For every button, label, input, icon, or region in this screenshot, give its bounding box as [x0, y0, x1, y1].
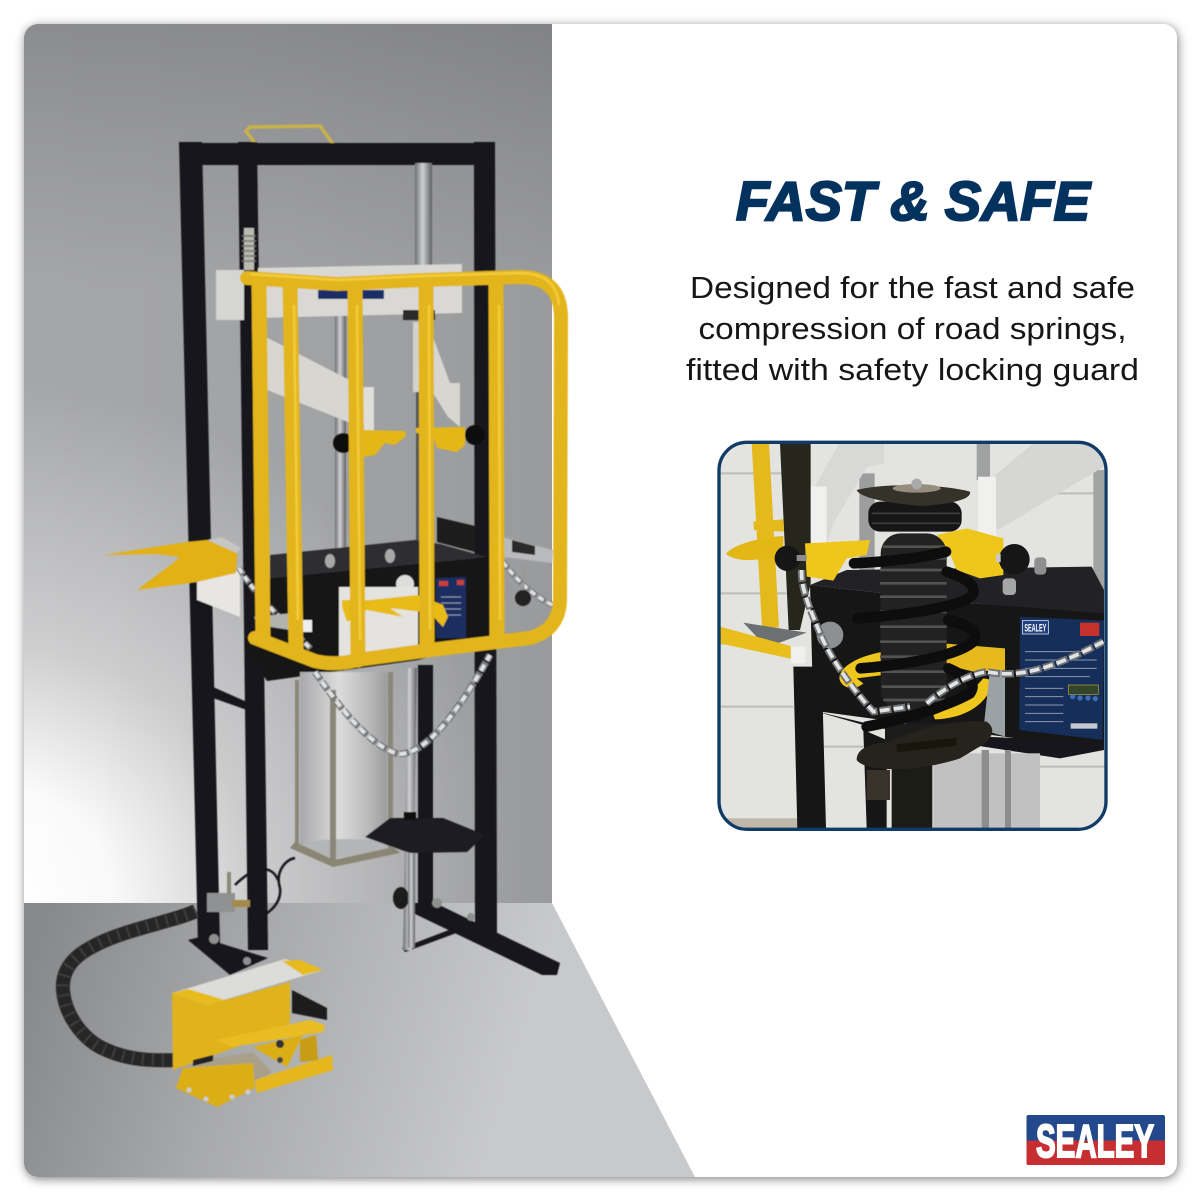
bolted plate — [817, 622, 843, 648]
piston rod and spring — [242, 163, 432, 548]
foot pedal plate — [365, 812, 485, 948]
foot bolts — [209, 898, 475, 965]
carry handle — [246, 126, 333, 144]
galvanised chain — [802, 570, 1103, 712]
silver arms — [815, 443, 884, 543]
guard clamp and knob — [254, 537, 553, 632]
coil spring — [854, 552, 975, 727]
yellow spring seats and knobs — [333, 425, 485, 457]
air hose — [63, 911, 196, 1060]
strut bellows — [857, 479, 992, 828]
black frame — [179, 142, 560, 975]
white cross beam with arms — [216, 264, 462, 432]
knobs — [775, 546, 800, 571]
inset photo — [719, 442, 1106, 829]
SEALEY data plate — [1019, 617, 1104, 740]
brick wall — [720, 443, 1105, 828]
left fork seat — [103, 537, 241, 617]
data plate — [436, 577, 466, 638]
guard tube and uprights — [780, 443, 811, 630]
safety chains — [239, 562, 555, 754]
product: spring compressor machine — [63, 126, 561, 1107]
description text: Designed for the fast and safe — [690, 270, 1135, 305]
black platform — [810, 567, 1104, 615]
air valve block — [207, 872, 250, 912]
description text: compression of road springs, — [698, 311, 1126, 346]
foot valve — [172, 959, 333, 1107]
yellow seats — [805, 540, 870, 581]
yellow safety guard — [247, 277, 561, 663]
platform box — [247, 517, 488, 681]
inset border — [719, 442, 1106, 829]
silver cylinder — [933, 753, 1040, 828]
description text: fitted with safety locking guard — [686, 352, 1139, 387]
air cylinder — [235, 668, 417, 950]
rods — [977, 443, 990, 480]
panel: grey studio backdrop — [24, 24, 695, 1177]
SEALEY data plate: SEALEY — [1024, 622, 1046, 634]
guard highlights — [250, 273, 559, 640]
description text — [686, 270, 1139, 387]
title: FAST & SAFE — [736, 170, 1092, 232]
